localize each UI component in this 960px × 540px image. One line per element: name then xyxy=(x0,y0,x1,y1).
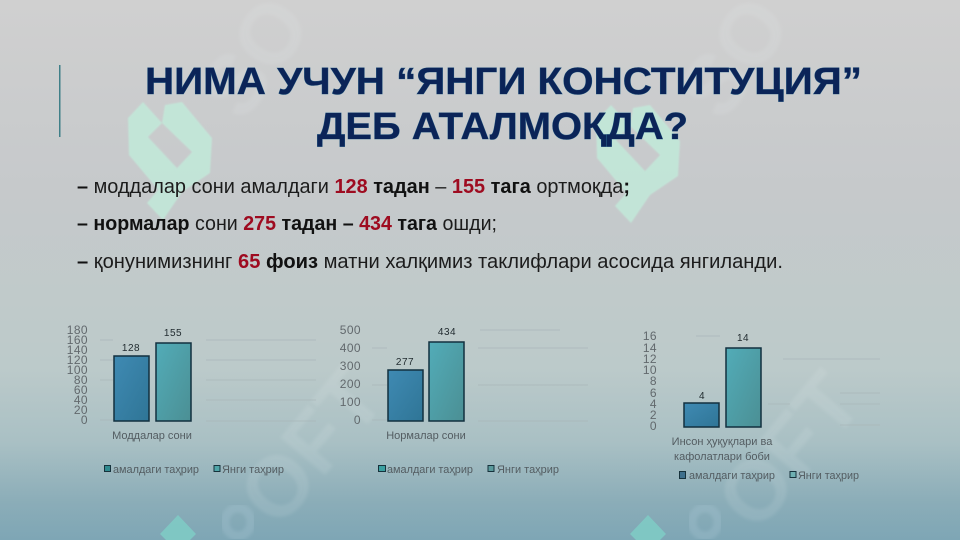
title: ДЕБ АТАЛМОҚДА? xyxy=(317,106,688,148)
bar: current 4 xyxy=(684,403,719,427)
legend xyxy=(104,464,284,476)
y axis labels: 60 xyxy=(74,383,88,397)
category label: Инсон ҳуқуқлари ва xyxy=(672,436,773,448)
legend: амалдаги таҳрир xyxy=(689,470,775,482)
y axis labels: 12 xyxy=(643,352,657,366)
legend: амалдаги таҳрир xyxy=(113,464,199,476)
y axis labels xyxy=(67,323,88,427)
y axis labels: 120 xyxy=(67,353,88,367)
y axis labels: 100 xyxy=(67,363,88,377)
legend: Янги таҳрир xyxy=(798,470,859,482)
bar: current 128 xyxy=(114,356,149,421)
text block: key facts: – нормалар сони 275 тадан – 434 тага ошди; xyxy=(77,213,497,235)
y axis labels: 4 xyxy=(650,397,657,411)
value label 14: 14 xyxy=(737,333,749,344)
value label 434: 434 xyxy=(438,327,456,338)
category label: Нормалар сони xyxy=(386,430,466,442)
y axis labels: 14 xyxy=(643,341,657,355)
legend: Янги таҳрир xyxy=(222,464,284,476)
value label 155: 155 xyxy=(164,328,182,339)
watermark: text bottom left: OFT xyxy=(221,351,403,540)
bar: new 14 xyxy=(726,348,761,427)
y axis labels: 80 xyxy=(74,373,88,387)
chart: norms xyxy=(340,323,588,476)
legend: Янги таҳрир xyxy=(497,464,559,476)
legend xyxy=(680,470,859,482)
chart: articles xyxy=(67,323,316,476)
text block: key facts xyxy=(77,176,783,273)
title: НИМА УЧУН “ЯНГИ КОНСТИТУЦИЯ” xyxy=(145,61,862,103)
y axis labels: 0 xyxy=(81,413,88,427)
y axis labels: 0 xyxy=(650,419,657,433)
y axis labels: 10 xyxy=(643,363,657,377)
watermark: ring bottom right xyxy=(692,508,718,536)
accent line xyxy=(59,65,60,137)
category label: Моддалар сони xyxy=(112,430,192,442)
legend: амалдаги таҳрир xyxy=(387,464,473,476)
y axis labels: 200 xyxy=(340,377,361,391)
y axis labels: 400 xyxy=(340,341,361,355)
y axis labels: 8 xyxy=(650,374,657,388)
y axis labels: 16 xyxy=(643,329,657,343)
value label 128: 128 xyxy=(122,343,140,354)
watermark: bottom diamond right xyxy=(630,515,666,540)
value label 277: 277 xyxy=(396,357,414,368)
y axis labels: 140 xyxy=(67,343,88,357)
y axis labels: 2 xyxy=(650,408,657,422)
y axis labels: 0 xyxy=(354,413,361,427)
watermark: ring bottom left xyxy=(225,508,251,536)
watermark: bottom diamond left xyxy=(160,515,196,540)
y axis labels: 20 xyxy=(74,403,88,417)
y axis labels: 300 xyxy=(340,359,361,373)
title xyxy=(145,61,862,148)
bar: current 277 xyxy=(388,370,423,421)
y axis labels: 160 xyxy=(67,333,88,347)
y axis labels: 40 xyxy=(74,393,88,407)
watermark: logo right xyxy=(596,105,680,223)
y axis labels: 180 xyxy=(67,323,88,337)
bar: new 155 xyxy=(156,343,191,421)
text block: key facts: – моддалар сони амалдаги 128 тадан – 155 тага ортмоқда; xyxy=(77,176,630,198)
value label 4: 4 xyxy=(699,391,705,402)
watermark: logo left xyxy=(128,102,212,220)
y axis labels: 6 xyxy=(650,386,657,400)
y axis labels xyxy=(340,323,361,427)
bar: new 434 xyxy=(429,342,464,421)
category label xyxy=(672,436,773,463)
y axis labels: 100 xyxy=(340,395,361,409)
y axis labels: 500 xyxy=(340,323,361,337)
legend xyxy=(378,464,559,476)
y axis labels xyxy=(643,329,657,433)
text block: key facts: – қонунимизнинг 65 фоиз матни халқимиз таклифлари асосида янгиланди. xyxy=(77,251,783,273)
category label: кафолатлари боби xyxy=(674,451,770,463)
chart: human rights chapter xyxy=(643,329,880,482)
